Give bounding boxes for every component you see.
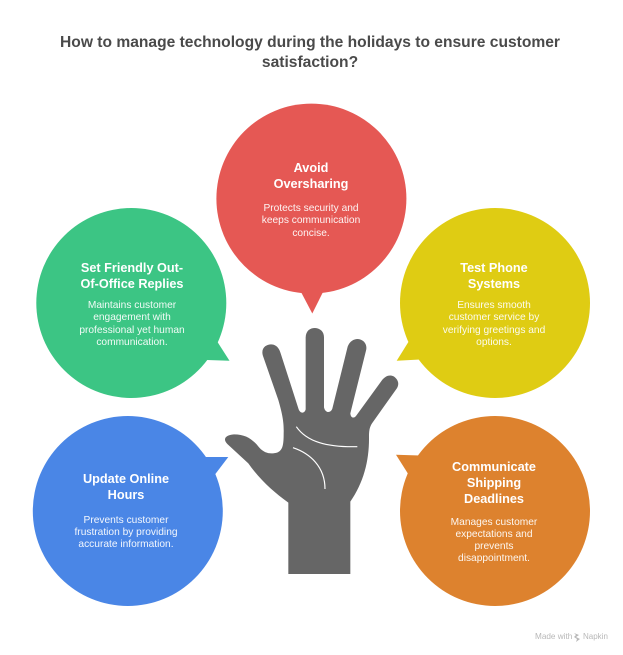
- text: avoid oversharing: Avoid: [294, 160, 328, 174]
- text: avoid oversharing: Oversharing: [274, 176, 348, 190]
- text: communicate shipping deadlines: Deadlines: [464, 492, 524, 506]
- text: avoid oversharing: [262, 160, 360, 239]
- text: set friendly out-of-office replies: engagement with: [93, 312, 171, 323]
- text: set friendly out-of-office replies: [79, 260, 185, 348]
- text: test phone systems: options.: [476, 337, 512, 348]
- bubble: orange: [396, 416, 590, 606]
- bubble: blue: [33, 416, 228, 606]
- text: avoid oversharing: Protects security and: [263, 203, 359, 214]
- bubble: green: [36, 208, 230, 398]
- text: test phone systems: Systems: [468, 276, 520, 290]
- text: test phone systems: Test Phone: [460, 260, 528, 274]
- title: How to manage technology during the holidays to ensure customer satisfaction?: [60, 34, 560, 71]
- text: set friendly out-of-office replies: professional yet human: [79, 325, 185, 336]
- text: update online hours: Update Online: [83, 472, 169, 486]
- text: test phone systems: Ensures smooth: [457, 300, 531, 311]
- text: set friendly out-of-office replies: Maintains customer: [88, 300, 176, 311]
- text: update online hours: frustration by providing: [74, 527, 178, 538]
- bubble: yellow: [397, 208, 590, 398]
- text: set friendly out-of-office replies: communication.: [96, 337, 168, 348]
- text: communicate shipping deadlines: disappointment.: [458, 553, 530, 564]
- text: communicate shipping deadlines: Shipping: [467, 476, 521, 490]
- text: update online hours: accurate information.: [78, 539, 174, 550]
- text: test phone systems: customer service by: [449, 312, 539, 323]
- text: communicate shipping deadlines: prevents: [474, 541, 514, 552]
- text: test phone systems: verifying greetings and: [443, 325, 545, 336]
- text: set friendly out-of-office replies: Of-Office Replies: [81, 276, 183, 290]
- text: communicate shipping deadlines: Manages customer: [451, 516, 537, 528]
- watermark: Napkin: [583, 632, 608, 641]
- text: update online hours: Hours: [108, 488, 144, 502]
- watermark: [535, 632, 608, 642]
- text: communicate shipping deadlines: Communicate: [452, 460, 536, 474]
- text: avoid oversharing: keeps communication: [262, 215, 360, 226]
- text: communicate shipping deadlines: expectations and: [455, 529, 533, 540]
- text: test phone systems: [442, 260, 545, 348]
- text: update online hours: Prevents customer: [84, 514, 168, 526]
- icon: hand: [225, 328, 398, 574]
- text: set friendly out-of-office replies: Set Friendly Out-: [81, 260, 183, 274]
- bubble: red: [216, 104, 406, 314]
- text: communicate shipping deadlines: [451, 460, 538, 564]
- text: avoid oversharing: concise.: [292, 228, 330, 239]
- watermark: Made with: [535, 632, 572, 641]
- text: update online hours: [74, 472, 178, 550]
